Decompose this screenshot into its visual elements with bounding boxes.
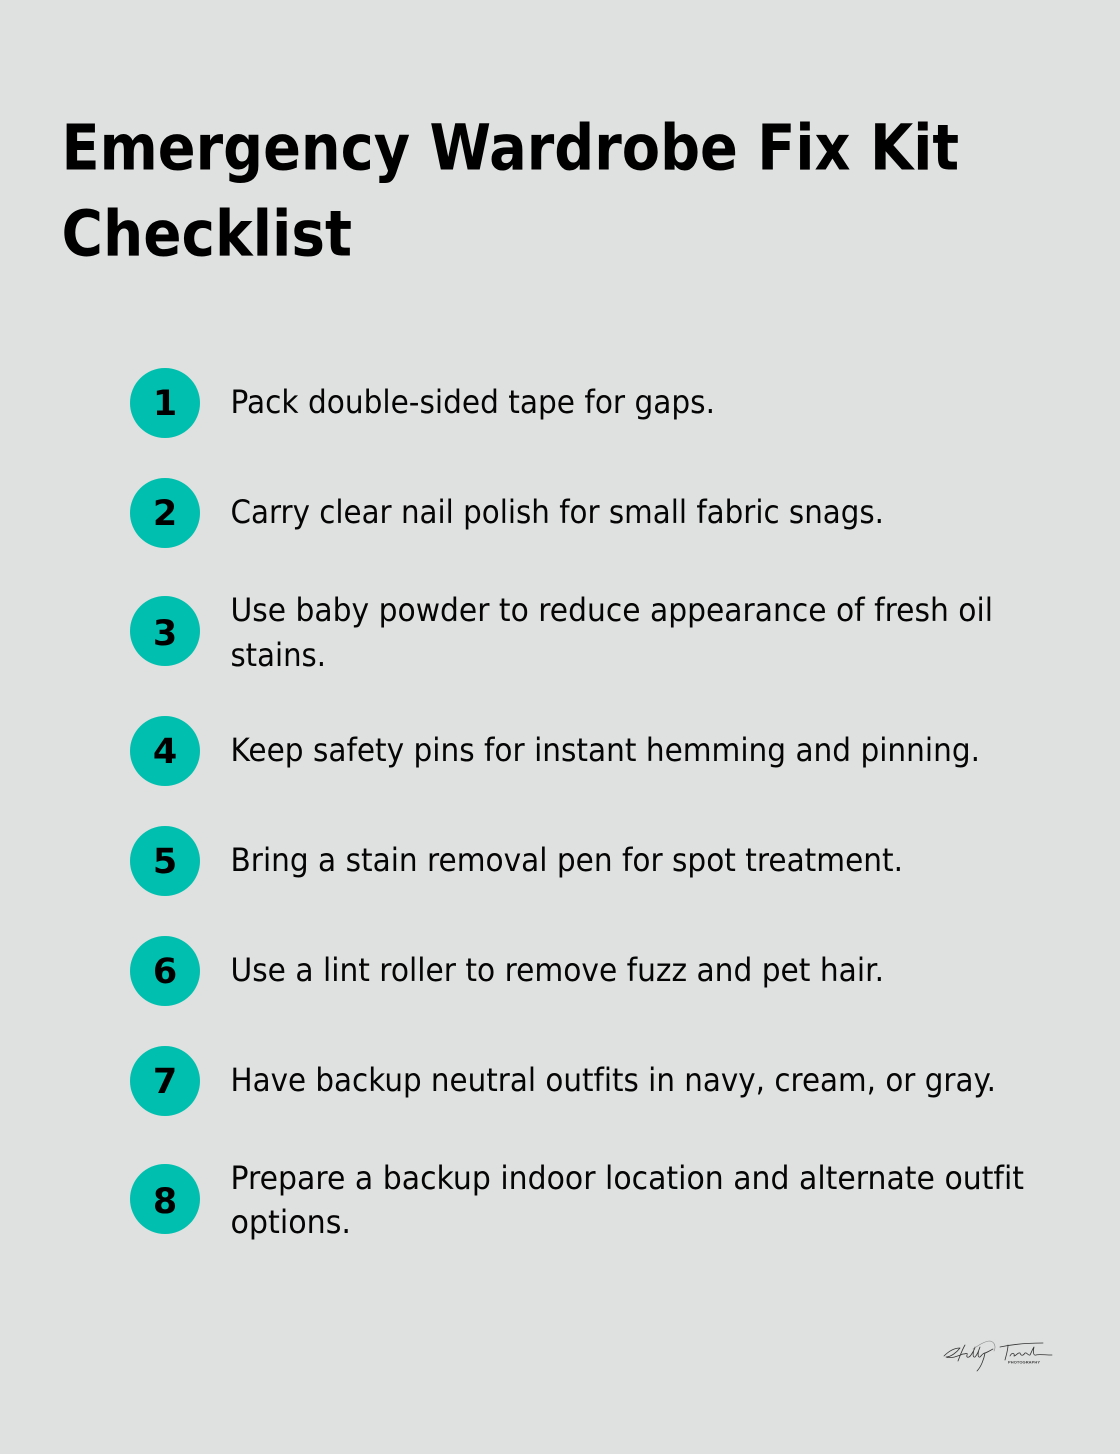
item 8 (130, 1159, 1024, 1241)
item 4: Keep safety pins for instant hemming and pinning. (230, 731, 980, 769)
item 8: 8 (153, 1182, 177, 1222)
item 4: 4 (153, 732, 177, 772)
item 2: Carry clear nail polish for small fabric snags. (230, 493, 884, 531)
item 8: options. (230, 1203, 351, 1241)
item 1: 1 (153, 384, 177, 424)
item 8: Prepare a backup indoor location and alternate outfit (230, 1159, 1024, 1197)
signature logo (944, 1341, 1052, 1371)
item 5: Bring a stain removal pen for spot treatment. (230, 841, 903, 879)
item 3 (130, 591, 993, 674)
item 2: 2 (153, 494, 177, 534)
item 7: Have backup neutral outfits in navy, cream, or gray. (230, 1061, 996, 1099)
item 3: 3 (153, 614, 177, 654)
item 6: 6 (153, 952, 177, 992)
title (62, 112, 959, 270)
title: Emergency Wardrobe Fix Kit (62, 112, 959, 184)
item 5 (130, 826, 903, 896)
title: Checklist (62, 198, 352, 270)
item 4 (130, 716, 980, 786)
item 6 (130, 936, 884, 1006)
item 3: Use baby powder to reduce appearance of fresh oil (230, 591, 993, 629)
item 1: Pack double-sided tape for gaps. (230, 383, 715, 421)
item 1 (130, 368, 715, 438)
item 7: 7 (153, 1062, 177, 1102)
signature logo: PHOTOGRAPHY (1008, 1360, 1040, 1364)
item 2 (130, 478, 884, 548)
checklist (130, 368, 1024, 1241)
item 6: Use a lint roller to remove fuzz and pet hair. (230, 951, 884, 989)
item 5: 5 (153, 842, 177, 882)
item 7 (130, 1046, 996, 1116)
item 3: stains. (230, 636, 326, 674)
